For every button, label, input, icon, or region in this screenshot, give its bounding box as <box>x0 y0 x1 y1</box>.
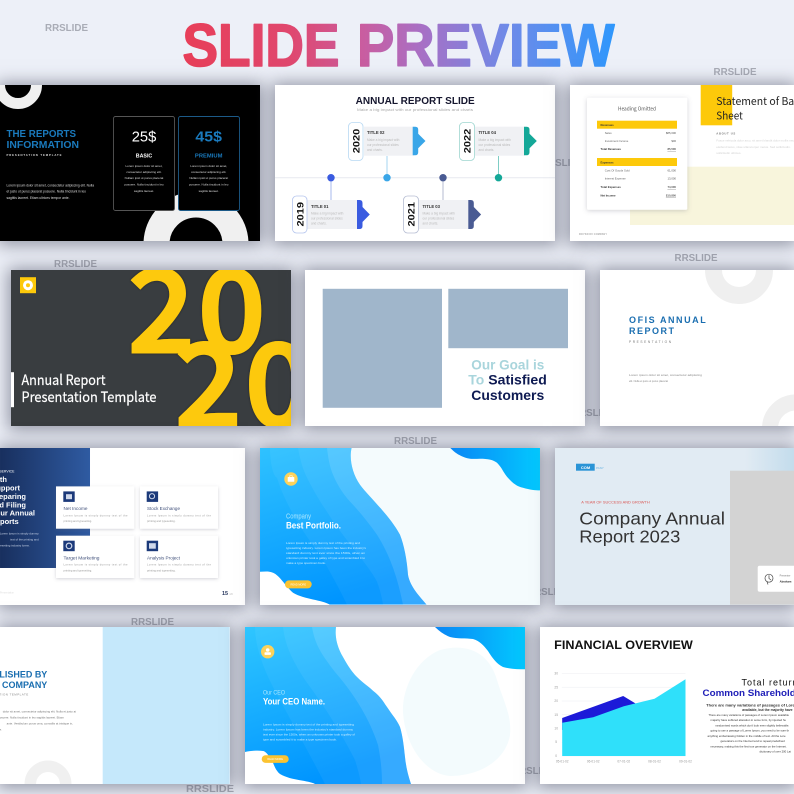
total return description: going to use a passage of Lorem Ipsum, you need to be sure th <box>710 729 789 733</box>
area chart: 08-01-02 <box>648 760 661 764</box>
decorative ring bottom <box>156 204 236 284</box>
total return description: majority have suffered alteration in some form, by injected hu <box>710 718 786 722</box>
financial statement card: 13,000 <box>667 176 676 180</box>
blue gradient panel <box>0 448 90 568</box>
panel paragraph <box>0 532 39 548</box>
timeline card 2022: Make a big impact with <box>478 138 511 142</box>
cover title: Presentation Template <box>22 387 157 407</box>
card: stock exchange: Lorem Ipsum is simply dummy text of the <box>147 514 211 518</box>
read more button: READ MORE <box>290 583 306 587</box>
description text: Lorem ipsum dolor sit amet, consectetur adipiscing <box>629 372 703 376</box>
panel: company annual report slide <box>555 448 794 605</box>
icon: person <box>261 645 274 658</box>
body text: unknown printer took a galley of type and scrambled it to <box>286 556 365 560</box>
slide heading: Sheet <box>716 108 743 123</box>
page number <box>222 591 234 597</box>
pale background blob <box>403 648 510 776</box>
card: target marketing: printing and typesetting. <box>64 569 92 573</box>
timeline card 2021 <box>404 196 481 233</box>
area chart: 30 <box>554 672 558 676</box>
timeline card 2021: Make a big impact with <box>422 212 455 216</box>
area chart: 0 <box>555 754 557 758</box>
pricing card: premium: sagittis laoreet. <box>199 189 219 193</box>
total return description: dictionary of over 200 Lat <box>759 749 791 753</box>
card: target marketing: Target Marketing <box>64 556 100 561</box>
body text: Lorem Ipsum is simply dummy text of the printing and typesetting <box>263 722 354 726</box>
slide heading: REPORT <box>629 325 674 335</box>
total return description: There are many variations of passages of Lorem Ipsum available <box>708 713 789 717</box>
area chart: 25 <box>554 685 558 689</box>
timeline card 2022: TITLE 04 <box>478 130 497 135</box>
decorative ring top <box>714 244 764 295</box>
pricing card: premium: 45$ <box>195 129 223 146</box>
heading: THE REPORTS <box>6 129 76 140</box>
subheading: PRESENTATION <box>629 339 672 343</box>
pricing card: basic: BASIC <box>136 154 153 160</box>
financial statement card: 61,000 <box>667 168 676 172</box>
slide heading <box>286 514 341 532</box>
financial statement card: Heading Omitted <box>618 105 656 112</box>
timeline card 2020: TITLE 02 <box>367 130 385 135</box>
panel: annual report 2020 cover slide <box>11 270 290 426</box>
top right blue wave <box>450 448 540 491</box>
slide heading: Our CEO <box>263 690 285 697</box>
icon: briefcase <box>284 473 298 486</box>
slide heading <box>716 94 794 123</box>
card: stock exchange: Stock Exchange <box>147 506 180 511</box>
timeline card 2022: 2022 <box>463 129 474 153</box>
pricing card: basic: Nullam ipsit ut purus placerat <box>125 176 164 180</box>
card: analysis project: Analysis Project <box>147 556 181 561</box>
financial statement card: Cost Of Goods Sold <box>605 168 630 172</box>
read more button: READ MORE <box>267 757 283 761</box>
slide heading: ANNUAL REPORT SLIDE <box>356 96 475 107</box>
timeline card 2019 <box>292 196 370 233</box>
financial statement card: 74,000 <box>667 185 676 189</box>
financial statement card: $85,000 <box>666 131 676 135</box>
description text: elit. Nulla et justo ut purus placerat <box>629 379 668 383</box>
about us text: sollicitudin ultrices. <box>716 151 741 155</box>
about us text: eleifend lacus, vitae ullamcorper metus. Sed sollicitudin. <box>716 145 791 149</box>
financial statement card: Interest Expense <box>605 176 626 180</box>
read more button <box>285 581 312 589</box>
background watermarks: RRSLIDE <box>131 617 174 628</box>
timeline axis with dots <box>275 156 555 200</box>
blue wave shape <box>260 448 440 605</box>
decorative ring top left <box>0 66 36 104</box>
about us text: Fusce vehicula dolor arcu, sit amet blandit dolor mollis nec. <box>716 138 794 142</box>
pricing card: basic <box>114 116 174 210</box>
company logo <box>576 464 604 471</box>
presenter card <box>758 566 794 592</box>
panel paragraph: text of the printing and <box>10 538 39 542</box>
panel: financial overview slide <box>540 627 794 784</box>
description text: Lorem ipsum dolor sit amet, consectetur adipiscing elit. Nulla <box>6 184 94 188</box>
card: stock exchange: printing and typesetting. <box>147 519 176 523</box>
background watermarks: RRSLIDE <box>527 587 570 598</box>
white corner wave <box>260 572 330 605</box>
body text: make a type specimen book. <box>286 561 326 565</box>
pricing card: basic: 25$ <box>132 129 157 146</box>
timeline card 2022 <box>460 122 537 160</box>
read more button <box>262 755 289 763</box>
financial statement card: $10,800 <box>666 194 676 198</box>
slide heading: Company <box>286 514 311 521</box>
image placeholder left <box>323 288 442 407</box>
page number: /20 <box>229 593 234 596</box>
card: stock exchange <box>140 487 218 529</box>
about us text: ABOUT US <box>716 132 735 136</box>
slide heading: FINANCIAL OVERVIEW <box>554 638 693 652</box>
area chart: 20 <box>554 699 558 703</box>
background watermarks: RRSLIDE <box>674 253 718 264</box>
area chart: 15 <box>554 713 558 717</box>
timeline card 2021: TITLE 03 <box>422 204 441 209</box>
decorative ring bottom right <box>770 402 794 454</box>
image placeholder right <box>448 288 568 348</box>
financial statement card: Sales <box>605 131 612 135</box>
presenter card: Presenter <box>780 575 791 578</box>
tagline: A YEAR OF SUCCESS AND GROWTH <box>581 501 651 505</box>
timeline card 2020 <box>348 122 426 160</box>
card: analysis project <box>140 536 218 578</box>
description text: et justo ut purus placerat posuere. Nulla tincidunt in leo <box>6 190 86 194</box>
financial statement card: Net Income <box>600 194 616 198</box>
goal statement <box>468 356 547 402</box>
timeline card 2021: our professional slides <box>422 216 455 220</box>
body text: typesetting industry. Lorem Ipsum has been the industry's <box>286 546 367 550</box>
timeline card 2020: and charts. <box>367 148 383 152</box>
body text: type and scrambled it to make a type specimen book. <box>263 737 337 741</box>
pale yellow block <box>630 167 794 225</box>
financial statement card: Investment Income <box>605 139 629 143</box>
goal statement: Our Goal is <box>471 356 545 372</box>
heading: INFORMATION <box>6 140 79 151</box>
pricing card: premium: consectetur adipiscing elit. <box>191 170 226 174</box>
timeline card 2021: and charts. <box>422 222 438 226</box>
card: analysis project: Lorem Ipsum is simply dummy text of the <box>147 563 211 567</box>
goal statement: Customers <box>471 386 545 402</box>
total return description: generators on the Internet tend to repeat predefined <box>720 739 785 743</box>
area chart: 07-01-02 <box>617 760 630 764</box>
white accent bar <box>11 372 14 407</box>
background watermarks: RRSLIDE <box>541 158 584 169</box>
large yellow 2020 numerals <box>126 216 314 461</box>
logo icon <box>20 277 36 293</box>
heading <box>6 129 79 151</box>
timeline card 2019: TITLE 01 <box>311 204 329 209</box>
yellow square accent <box>701 85 732 125</box>
slide heading: Best Portfolio. <box>286 521 341 532</box>
card: net income: printing and typesetting. <box>64 519 92 523</box>
financial statement card: Total Expenses <box>600 185 621 189</box>
description text: dolor sit amet, consectetur adipiscing elit. Nulla et justo at <box>3 710 76 714</box>
slide title <box>579 509 725 547</box>
body text <box>286 541 367 565</box>
area chart: 5 <box>555 740 557 744</box>
background watermarks: RRSLIDE <box>45 23 88 34</box>
goal statement: Satisfied <box>488 371 547 387</box>
card: net income <box>56 487 134 529</box>
card: net income: Lorem Ipsum is simply dummy text of the <box>64 514 128 518</box>
timeline card 2020: 2020 <box>351 129 362 153</box>
total return description: randomised words which don't look even slightly believable. <box>715 723 789 727</box>
description text: sagittis laoreet. Etiam ultrices tempor ante. <box>6 196 70 200</box>
timeline card 2022: and charts. <box>478 148 494 152</box>
decorative ring <box>30 766 66 794</box>
footer company label: ROYKIFOX COMPANY <box>579 233 607 236</box>
area chart <box>554 672 692 764</box>
financial statement card: Expenses <box>600 160 614 164</box>
card: net income: Net Income <box>64 506 88 511</box>
cover title <box>22 369 157 407</box>
card: target marketing: Lorem Ipsum is simply dummy text of the <box>64 563 128 567</box>
pricing card: basic: consectetur adipiscing elit. <box>126 170 162 174</box>
timeline card 2019: and charts. <box>311 222 327 226</box>
slide heading <box>629 314 706 335</box>
financial statement card: $00 <box>671 139 676 143</box>
body text: standard dummy text ever since the 1500s, when an <box>286 551 365 555</box>
pricing card: basic: Lorem ipsum dolor sit amet, <box>125 164 163 168</box>
description text <box>6 184 94 200</box>
timeline card 2019: 2019 <box>295 202 306 226</box>
pricing card: premium: PREMIUM <box>195 154 222 160</box>
company logo: COM <box>581 465 591 470</box>
background watermarks: RRSLIDE <box>394 436 437 447</box>
top right gradient <box>745 448 794 471</box>
financial statement card: Total Revenues <box>600 147 621 151</box>
description text <box>0 710 76 732</box>
panel: satisfied customers slide <box>305 270 585 426</box>
presenter card: Abraham <box>780 580 792 584</box>
total return description: necessary, making this the first true generator on the Internet. <box>710 744 786 748</box>
company logo: PANY <box>596 466 604 470</box>
description text <box>629 372 703 383</box>
pricing card: premium: Lorem ipsum dolor sit amet, <box>190 164 227 168</box>
body text <box>263 722 355 741</box>
slide title: Company Annual <box>579 509 725 529</box>
panel: annual report timeline slide <box>275 85 555 241</box>
image placeholder <box>730 471 794 605</box>
area chart: 05-01-02 <box>555 760 568 764</box>
title: PREVIEW <box>357 12 615 79</box>
page number: 15 <box>222 591 228 597</box>
footer label: Presentation <box>0 592 15 595</box>
panel: service cards slide <box>0 448 245 605</box>
financial statement card: Revenues <box>600 123 614 127</box>
background watermarks: RRSLIDE <box>512 766 555 777</box>
financial statement card <box>587 98 687 210</box>
pricing card: basic: posuere. Nulla tincidunt in leo <box>124 182 164 186</box>
slide heading <box>263 690 325 707</box>
card: target marketing <box>56 536 134 578</box>
panel: established by company slide <box>0 627 230 784</box>
slide heading: OFIS ANNUAL <box>629 314 706 324</box>
panel: best portfolio slide <box>260 448 540 605</box>
pricing card: premium: Nullam ipsit ut purus placerat <box>189 176 228 180</box>
total return description <box>706 703 794 753</box>
area chart: 06-01-02 <box>586 760 599 764</box>
background watermarks: RRSLIDE <box>54 259 97 270</box>
body text: text ever since the 1500s, when an unknown printer took a galley of <box>263 732 355 736</box>
timeline card 2020: our professional slides <box>367 143 399 147</box>
body text: industry. Lorem Ipsum has been the industry's standard dummy <box>263 727 354 731</box>
area chart: 09-01-02 <box>679 760 692 764</box>
timeline card 2021: 2021 <box>407 201 418 226</box>
blue wave shape <box>245 627 420 784</box>
subheading: PRESENTATION TEMPLATE <box>6 153 62 157</box>
body text: Lorem Ipsum is simply dummy text of the printing and <box>286 541 360 545</box>
timeline card 2019: our professional slides <box>311 216 343 220</box>
total return description: available, but the majority have <box>742 708 792 712</box>
total return heading <box>702 678 794 699</box>
title: SLIDE <box>182 12 340 79</box>
timeline card 2020: Make a big impact with <box>367 138 400 142</box>
cover title: Annual Report <box>22 369 106 389</box>
background watermarks: RRSLIDE <box>572 408 615 419</box>
card: analysis project: printing and typesetting. <box>147 569 176 573</box>
panel paragraph: Lorem Ipsum is simply dummy <box>0 532 39 536</box>
slide subheading: Make a big impact with our professional slides and charts <box>357 107 473 112</box>
slide heading: Your CEO Name. <box>263 697 325 707</box>
total return description: anything embarrassing hidden in the middle of text. All the Lore <box>707 734 785 738</box>
total return description: There are many variations of passages of Lorem Ipsum <box>706 703 794 707</box>
slide title: Report 2023 <box>579 527 680 547</box>
timeline card 2022: our professional slides <box>478 143 511 147</box>
about us text <box>716 132 794 155</box>
pricing card: premium <box>178 116 240 210</box>
pricing card: basic: sagittis laoreet. <box>134 189 154 193</box>
background watermarks: RRSLIDE <box>714 67 757 78</box>
panel: statement of balance sheet slide <box>570 85 794 241</box>
panel heading <box>0 470 35 526</box>
area chart: 10 <box>554 726 558 730</box>
panel: ceo slide <box>245 627 525 784</box>
financial statement card: 85,500 <box>667 147 676 151</box>
description text: ante. Vestibulum purus urna, convallis at tristique in, <box>7 722 73 726</box>
panel: the reports information slide <box>0 85 260 241</box>
pricing card: premium: posuere. Nulla tincidunt in leo <box>189 182 229 186</box>
top right blue wave <box>435 627 525 669</box>
light blue image block <box>103 627 230 784</box>
slide heading <box>0 669 47 690</box>
timeline card 2019: Make a big impact with <box>311 212 344 216</box>
goal statement: To <box>468 371 484 387</box>
panel: ofis annual report slide <box>600 270 794 426</box>
